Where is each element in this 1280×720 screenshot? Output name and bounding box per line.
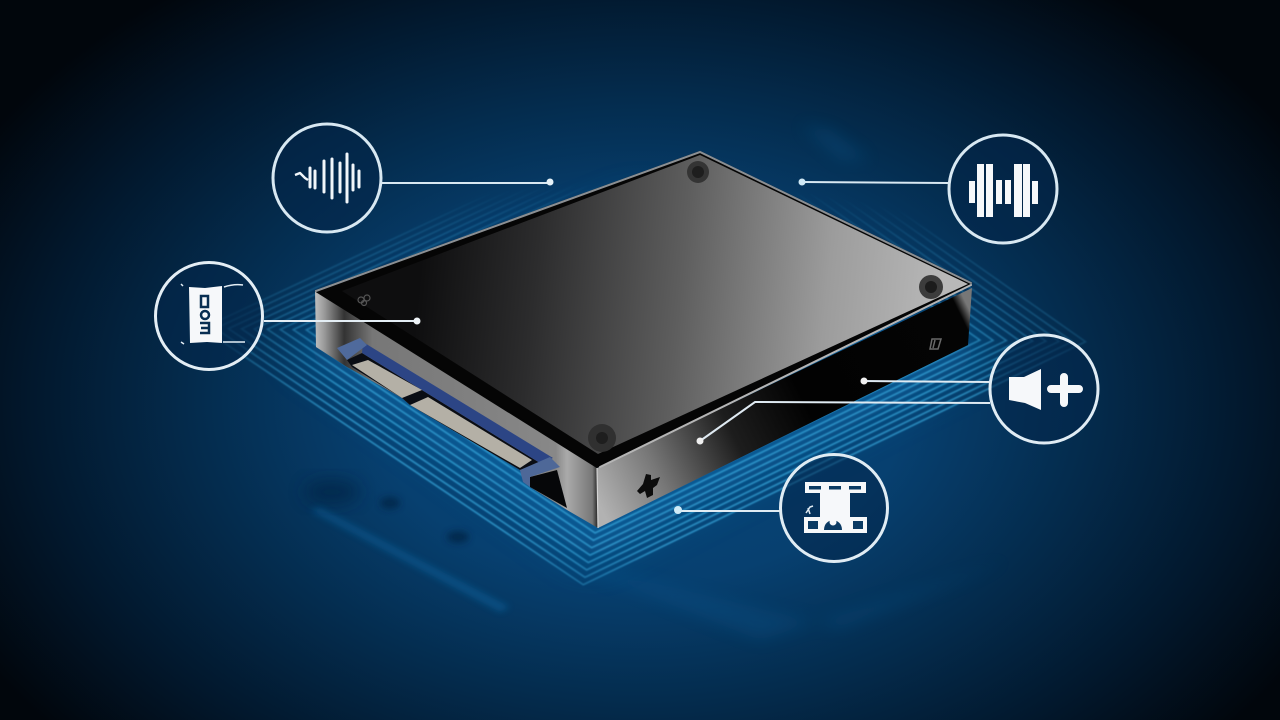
- callout: film strip icon: [674, 454, 888, 562]
- SSD drive: [315, 152, 972, 528]
- connector line: [382, 182, 550, 184]
- callout: wave icon: [273, 124, 554, 232]
- top bezel: [316, 152, 971, 467]
- connector right tab: [520, 457, 560, 487]
- callout: memory chip icon: [156, 262, 420, 370]
- connector contact 2: [410, 397, 532, 468]
- front corner edge highlight: [597, 468, 598, 528]
- connector shadow slot: [347, 353, 540, 470]
- bezel edge highlights: [316, 152, 971, 467]
- connector line: [264, 320, 417, 322]
- concentric circuit lines around drive: [222, 197, 1086, 586]
- screws: [358, 161, 943, 452]
- left side face: [315, 290, 598, 528]
- icon: side port mark: [930, 339, 941, 349]
- right side face: [597, 288, 972, 528]
- connector line: [802, 182, 948, 183]
- connector left tab: [337, 338, 367, 360]
- connector: [337, 338, 567, 508]
- background board shadows and streaks: [290, 125, 1010, 640]
- connector rear recess: [530, 470, 567, 508]
- connector blue rail: [362, 342, 553, 463]
- top face: [342, 155, 968, 454]
- callout: speaker plus icon: [696, 335, 1098, 444]
- connector lines: [700, 381, 990, 441]
- icon: logo mark on side: [637, 474, 660, 498]
- callout: equalizer icon: [798, 135, 1057, 243]
- connector contact 1: [352, 360, 422, 398]
- connector line: [678, 510, 780, 512]
